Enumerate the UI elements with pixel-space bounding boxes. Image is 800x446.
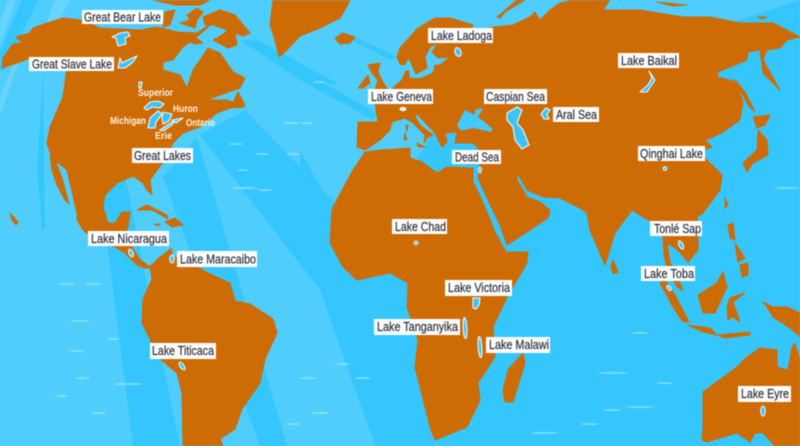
Baja California [50,155,69,204]
label: Great Lakes: Great Lakes [134,148,191,163]
label: Huron: Huron [173,103,198,115]
Lake Malawi water [477,336,483,358]
Great Bear Lake water [112,32,130,46]
Lake Victoria water [473,298,480,309]
label: Lake Eyre: Lake Eyre [741,386,789,401]
label: Tonlé Sap: Tonlé Sap [654,221,701,236]
Great Lakes small labels [110,87,215,142]
Novaya Zemlya [497,0,525,18]
label: Lake Victoria: Lake Victoria [448,280,511,295]
Great Slave Lake water [118,56,137,68]
North and Central America [2,18,245,268]
Lake Geneva water [400,107,406,111]
Borneo [698,272,727,313]
Lake Nicaragua water [127,249,135,257]
label: Lake Nicaragua: Lake Nicaragua [91,231,168,246]
Lesser Sunda [718,332,750,338]
Sumatra [660,280,689,322]
Eurasia [357,0,800,290]
label: Lake Tanganyika: Lake Tanganyika [377,319,459,334]
Lake Toba water [666,285,672,291]
label: Great Slave Lake: Great Slave Lake [32,56,112,72]
label: Caspian Sea: Caspian Sea [486,89,546,104]
Mediterranean islands [404,133,407,140]
Lake Chad water [414,241,418,245]
Sakhalin [735,80,755,112]
Qinghai Lake water [663,167,667,170]
label: Aral Sea: Aral Sea [556,107,598,122]
Aral Sea water [541,108,550,119]
label: Lake Ladoga: Lake Ladoga [431,28,493,43]
Newfoundland [232,92,245,105]
label: Erie: Erie [155,130,172,142]
label: Lake Chad: Lake Chad [395,219,446,234]
Lake Tanganyika water [463,317,467,339]
Lake Ladoga water [454,47,462,57]
Lake Huron water [162,112,172,124]
Caribbean [137,205,168,219]
Caspian Sea water [507,107,529,149]
Arabian Peninsula [478,165,550,245]
Java [688,325,717,335]
Iceland [335,33,355,44]
Greenland [270,0,350,57]
label: Ontario: Ontario [186,117,215,129]
Sulawesi [727,293,745,322]
Lake Michigan water [148,111,162,128]
Dead Sea water [479,167,481,173]
Sri Lanka [611,260,618,274]
Lake Erie water [160,120,175,131]
Hokkaido [753,115,770,128]
Lake Baikal water [640,71,655,92]
Australia [702,343,800,446]
label: Lake Baikal: Lake Baikal [621,53,677,68]
small Canadian lake [139,82,142,88]
Black Sea [457,108,492,132]
South America [142,249,277,446]
label: Qinghai Lake: Qinghai Lake [640,146,703,161]
Lake Eyre water [761,406,765,416]
label: Lake Titicaca: Lake Titicaca [152,343,215,358]
Honshu [743,130,768,172]
Lake Titicaca water [178,361,186,371]
label: Lake Maracaibo: Lake Maracaibo [180,252,256,266]
Ireland [358,75,370,88]
label: Lake Geneva: Lake Geneva [371,89,433,104]
New Guinea [763,302,800,337]
lakes [112,32,765,416]
Lake Maracaibo water [170,255,174,263]
label: Michigan: Michigan [110,115,146,127]
Taiwan [725,198,728,208]
Tonle Sap water [677,240,685,250]
Arctic islands [203,10,250,48]
Philippines [728,223,735,240]
Great Britain [368,63,388,90]
label: Lake Malawi: Lake Malawi [489,337,549,352]
label: Great Bear Lake: Great Bear Lake [84,10,161,24]
label: Lake Toba: Lake Toba [644,266,695,281]
Africa [330,148,528,440]
Lake Ontario water [172,118,183,123]
label: Superior: Superior [138,87,173,99]
Lake Superior water [144,101,164,110]
label: Dead Sea: Dead Sea [455,150,500,164]
Madagascar [503,353,525,402]
